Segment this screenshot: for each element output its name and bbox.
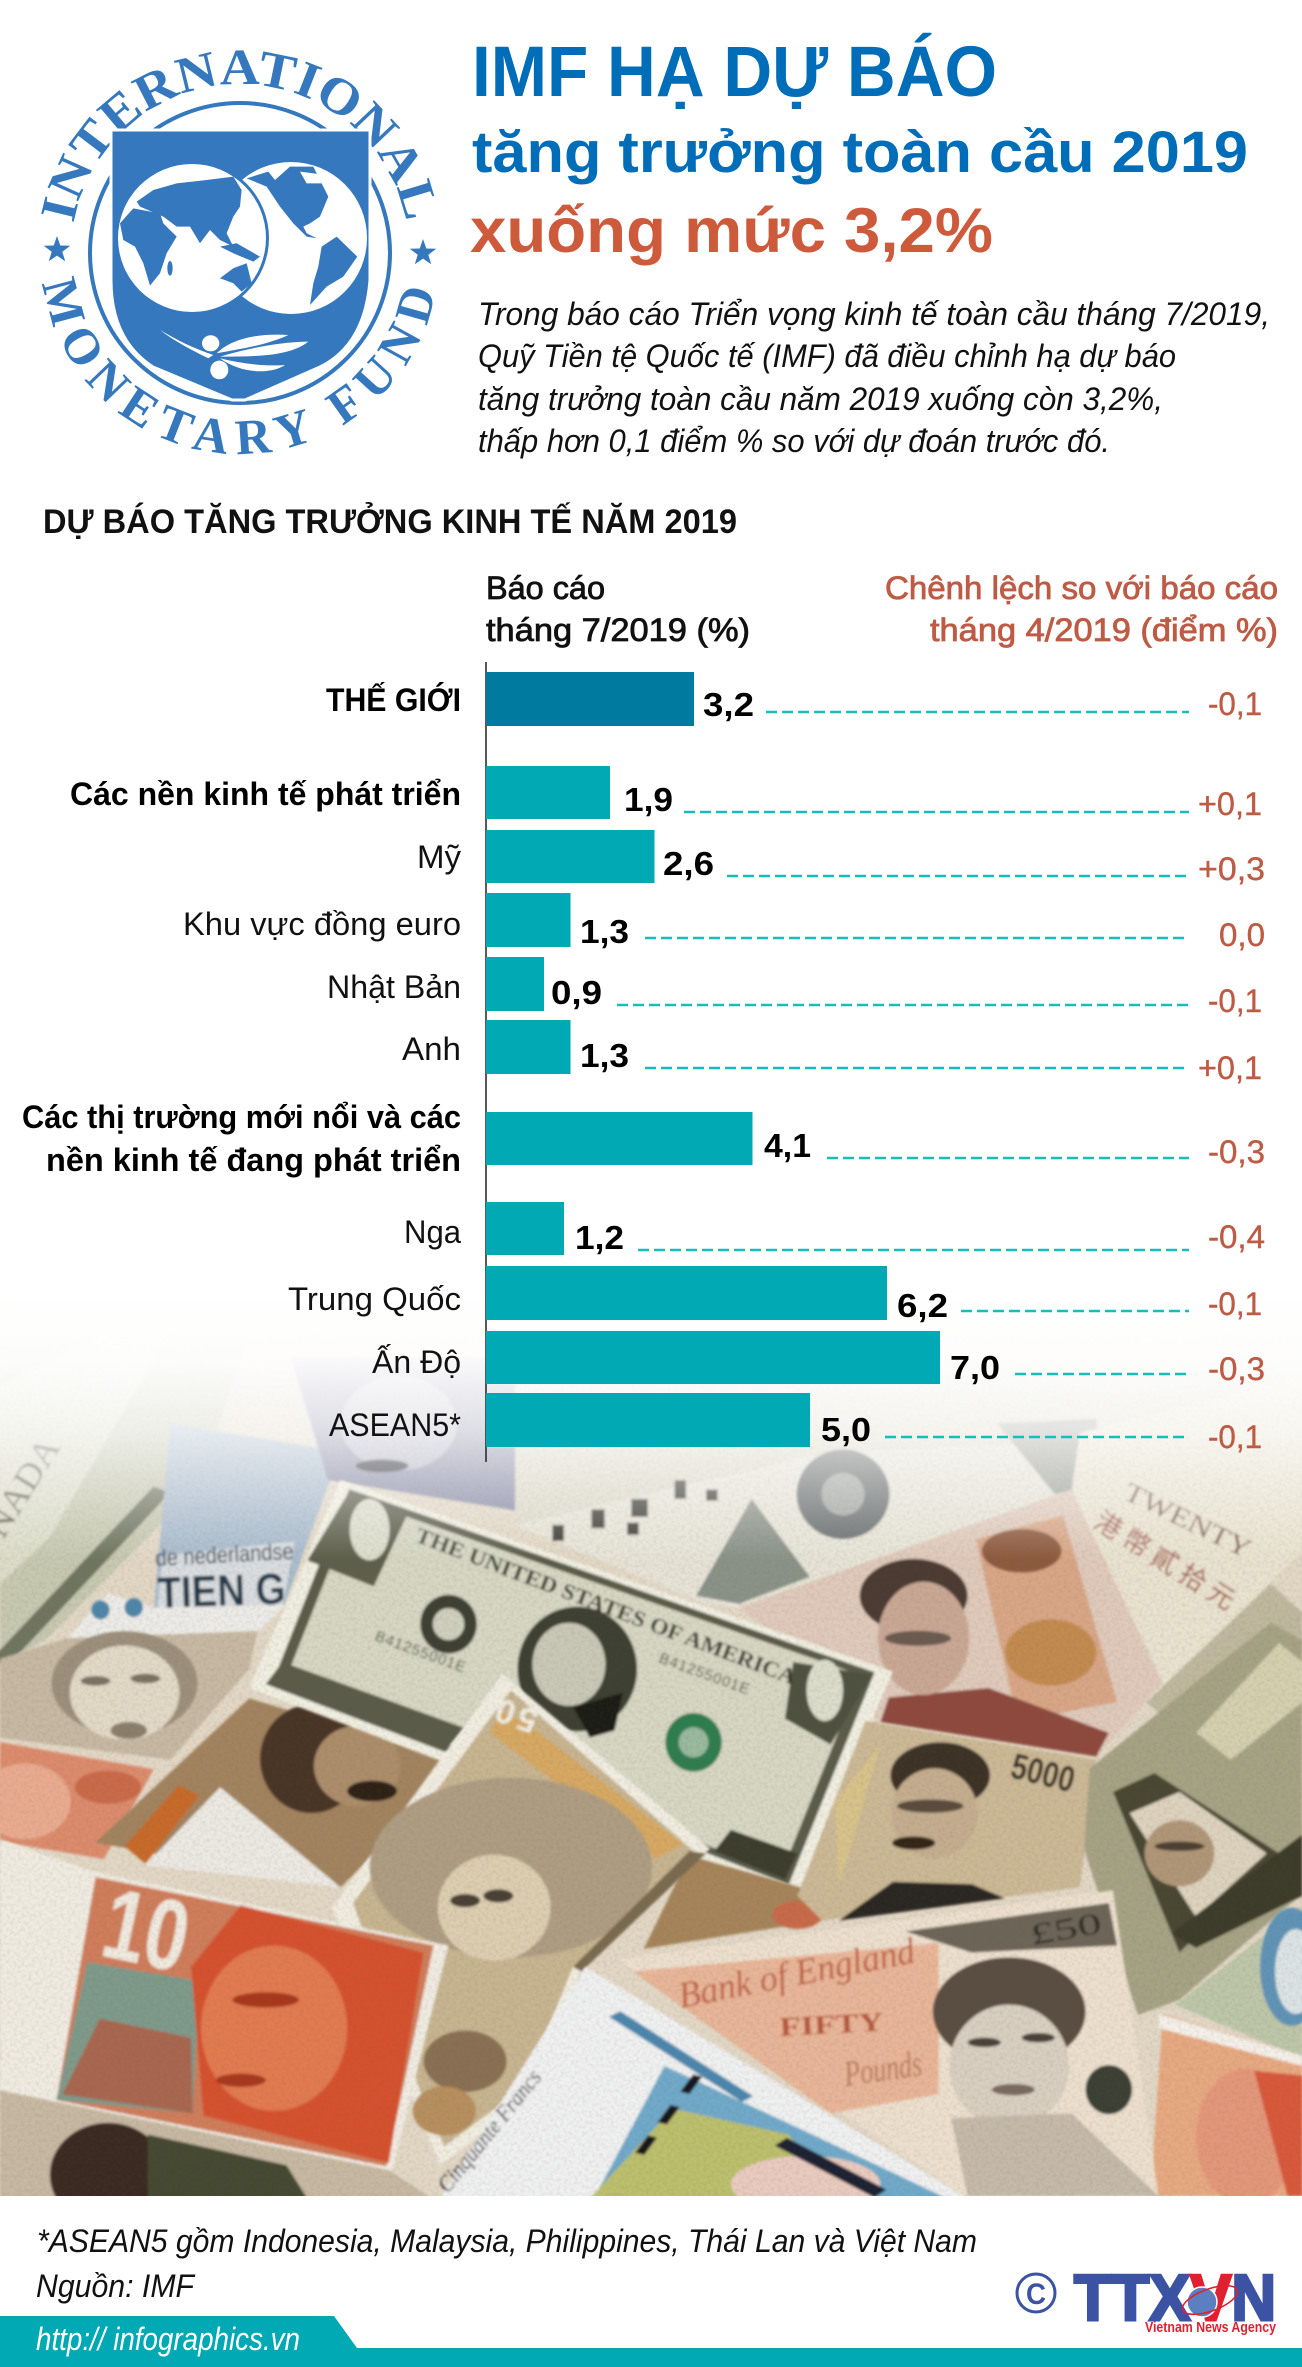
row: ASEAN5: ASEAN5* [329, 1407, 461, 1443]
background: banknotes collage [0, 1365, 1302, 2196]
banknote: bottom left [0, 2090, 430, 2196]
banknote: German portrait [298, 1374, 516, 1512]
banknote: German 50 mark [332, 1674, 710, 2165]
banknote: Twenty dollars: 港幣貳拾元 [1089, 1506, 1240, 1616]
banknote: Thai [739, 1489, 1163, 1756]
banknote: right blue [1175, 1905, 1302, 2059]
banknote: UK 50 pounds: £50 [1027, 1907, 1104, 1952]
row: Các thị trường mới nổi [22, 1099, 1265, 1178]
column header: July 2019 report: Báo cáo [486, 570, 605, 606]
row: Khu vực đồng euro [183, 893, 1265, 953]
background fade to white [0, 1290, 1302, 1560]
row: Thế giới: THẾ GIỚI [326, 682, 461, 718]
banknote: bottom right [1150, 2014, 1302, 2205]
row: Thế giới [326, 672, 1262, 726]
row: Các nền kinh tế phát triển: Các nền kinh tế phát triển [70, 776, 461, 812]
axis [485, 662, 487, 1462]
row: Nga: Nga [404, 1214, 461, 1250]
row: Mỹ: 2,6 [663, 845, 714, 882]
banknote: US 10 dollars: THE UNITED STATES OF AMERICA [412, 1522, 800, 1690]
banknote: UK 50 pounds: Bank of England [675, 1931, 919, 2017]
logo ring text: International: INTERNATIONAL [41, 50, 434, 222]
column header: July 2019 report: tháng 7/2019 (%) [486, 612, 750, 648]
banknote: Dutch: TIEN G [157, 1565, 286, 1618]
footnote: *ASEAN5 gồm Indonesia, Malaysia, Philippines, Thái Lan và Việt Nam [37, 2223, 977, 2259]
column header: July 2019 report [486, 570, 750, 648]
row: Trung Quốc [288, 1266, 1262, 1324]
footer url: http:// infographics.vn [36, 2321, 300, 2357]
row: Ấn Độ: 7,0 [950, 1349, 1000, 1386]
row: Anh: Anh [402, 1031, 461, 1067]
agency name: Vietnam News Agency [1145, 2319, 1277, 2336]
logo shield [111, 130, 370, 400]
banknote: US 10 dollars [249, 1480, 893, 1897]
copyright mark: C [1026, 2278, 1046, 2311]
logo star right [410, 239, 436, 264]
row: Trung Quốc: 6,2 [897, 1287, 948, 1324]
banknote: French brown [96, 1698, 465, 1887]
banknote: Japan 5000 yen: 5000 [1007, 1745, 1079, 1800]
engraving texture over banknotes [0, 1465, 1302, 2196]
banknote: French 50 francs: Cinquante Francs [432, 2065, 546, 2197]
title line 3: xuống mức 3,2% [470, 196, 993, 266]
source: Nguồn: IMF [36, 2268, 196, 2304]
globe emblem [1179, 2280, 1241, 2320]
intro paragraph: Quỹ Tiền tệ Quốc tế (IMF) đã điều chỉnh hạ dự báo [478, 338, 1176, 374]
logo ring text: Monetary Fund: MONETARY FUND [42, 276, 432, 454]
row: Các thị trường mới nổi: -0,3 [1208, 1134, 1265, 1170]
banknote: Dutch: de nederlandse [155, 1538, 294, 1571]
TTXVN logo [1017, 2261, 1277, 2336]
row: Các thị trường mới nổi: Các thị trường mới nổi và các [22, 1099, 461, 1135]
row: Các thị trường mới nổi: nền kinh tế đang phát triển [46, 1142, 461, 1178]
logo olive branch [160, 330, 308, 379]
row: Các thị trường mới nổi: 4,1 [764, 1127, 811, 1164]
row: Thế giới: -0,1 [1208, 686, 1262, 722]
banknote: Dutch [66, 1423, 341, 1639]
column header: difference vs April 2019 [885, 570, 1278, 648]
banknote: French 50 francs [432, 1967, 968, 2213]
bar chart [22, 662, 1265, 1462]
banknote: red left [0, 1742, 154, 1859]
banknote: UK 50 pounds [619, 1890, 1159, 2196]
title line 2: tăng trưởng toàn cầu 2019 [472, 120, 1248, 185]
row: Mỹ: +0,3 [1198, 851, 1265, 887]
banknote: US 10 dollars: B41255001E [373, 1628, 468, 1676]
banknote: Twenty dollars: TWENTY [1119, 1476, 1257, 1564]
banknote: Swiss 10 francs: 10 [93, 1867, 199, 1994]
banknote: UK 50 pounds: FIFTY [779, 2007, 884, 2042]
row: Nga [404, 1202, 1265, 1256]
row: Trung Quốc: Trung Quốc [288, 1281, 461, 1317]
logo globes [115, 161, 367, 315]
row: Nhật Bản: 0,9 [551, 974, 602, 1011]
row: ASEAN5: 5,0 [821, 1411, 871, 1448]
column header: difference vs April 2019: Chênh lệch so với báo cáo [885, 570, 1278, 606]
title [470, 33, 1248, 266]
row: Nhật Bản: -0,1 [1208, 983, 1262, 1019]
section heading: DỰ BÁO TĂNG TRƯỞNG KINH TẾ NĂM 2019 [43, 503, 737, 541]
row: Các nền kinh tế phát triển: +0,1 [1198, 786, 1262, 822]
row: Trung Quốc: -0,1 [1208, 1286, 1262, 1322]
row: Nhật Bản: Nhật Bản [327, 969, 461, 1005]
banknote: Saudi [1084, 1622, 1302, 2015]
banknote: Japan 5000 yen [644, 1721, 1096, 1949]
row: Anh: 1,3 [580, 1037, 629, 1074]
row: ASEAN5 [329, 1393, 1262, 1455]
row: Nga: 1,2 [575, 1219, 624, 1256]
wordmark: TTXVN [1074, 2261, 1276, 2334]
row: Các nền kinh tế phát triển [70, 766, 1262, 822]
row: Anh: +0,1 [1198, 1050, 1262, 1086]
footer band [0, 2316, 1302, 2367]
row: Nhật Bản [327, 957, 1262, 1019]
banknote: Canada [0, 1432, 168, 1664]
banknote: German 50 mark: 50 [490, 1690, 543, 1740]
intro paragraph: thấp hơn 0,1 điểm % so với dự đoán trước đó. [478, 423, 1110, 459]
row: Mỹ [417, 830, 1265, 887]
row: Ấn Độ: -0,3 [1208, 1351, 1265, 1387]
intro paragraph: Trong báo cáo Triển vọng kinh tế toàn cầu tháng 7/2019, [478, 296, 1270, 332]
IMF logo [41, 50, 436, 454]
intro paragraph [478, 296, 1270, 459]
banknote: Greek head [0, 1631, 257, 1760]
row: Anh [402, 1020, 1262, 1086]
row: Ấn Độ: Ấn Độ [372, 1344, 461, 1380]
banknote: UK 50 pounds: Pounds [841, 2043, 924, 2094]
column header: difference vs April 2019: tháng 4/2019 (điểm %) [930, 612, 1278, 648]
banknote: Swiss 10 francs [0, 1839, 449, 2171]
row: Thế giới: 3,2 [703, 686, 754, 723]
copyright mark [1017, 2274, 1055, 2312]
title line 1: IMF HẠ DỰ BÁO [472, 33, 997, 112]
intro paragraph: tăng trưởng toàn cầu năm 2019 xuống còn 3,2%, [478, 381, 1163, 417]
row: Khu vực đồng euro: 1,3 [580, 913, 629, 950]
row: Nga: -0,4 [1208, 1219, 1265, 1255]
logo star left [44, 236, 70, 261]
banknote: US 10 dollars: B41255001E [657, 1650, 752, 1698]
row: ASEAN5: -0,1 [1208, 1419, 1262, 1455]
row: Các nền kinh tế phát triển: 1,9 [624, 781, 673, 818]
row: Khu vực đồng euro: 0,0 [1219, 917, 1265, 953]
row: Mỹ: Mỹ [417, 839, 461, 875]
banknote: Twenty dollars [1070, 1428, 1302, 1712]
row: Khu vực đồng euro: Khu vực đồng euro [183, 906, 461, 942]
banknote: pale notes behind [514, 1384, 1098, 1608]
row: Ấn Độ [372, 1331, 1265, 1387]
